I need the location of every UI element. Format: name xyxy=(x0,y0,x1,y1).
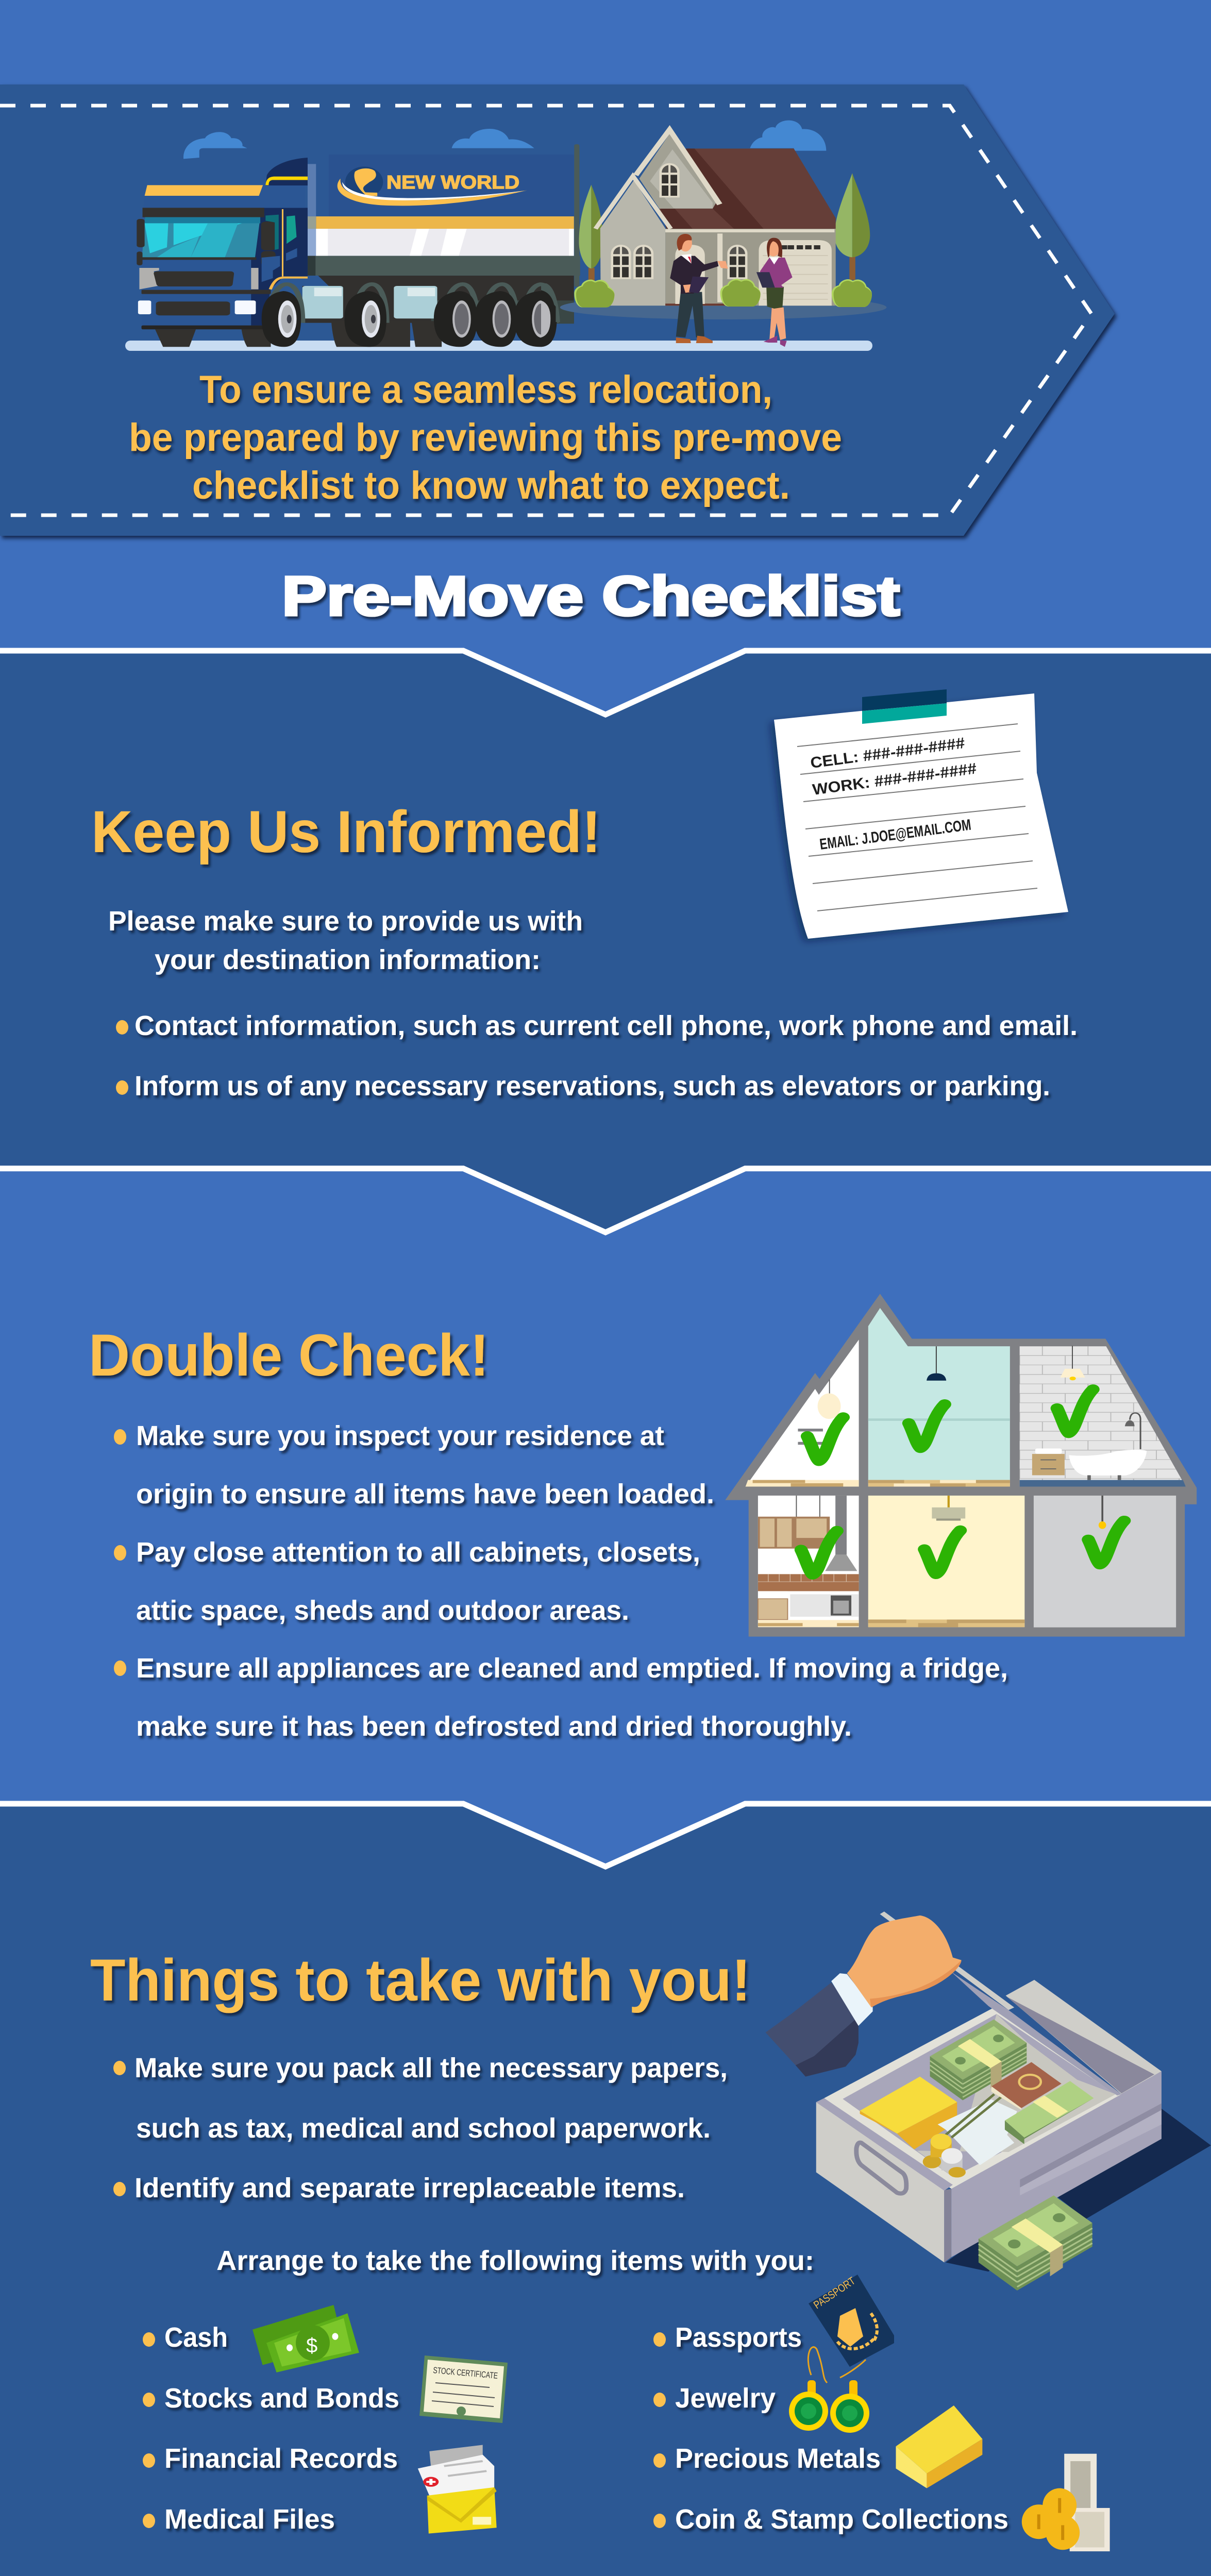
items list: left: Stocks and Bonds xyxy=(164,2383,399,2414)
items list: left: Cash xyxy=(164,2322,228,2353)
bullet list: such as tax, medical and school paperwork. xyxy=(136,2113,711,2144)
icon: earrings xyxy=(789,2347,869,2433)
icon: stock certificate: STOCK CERTIFICATE xyxy=(433,2365,498,2381)
icon: gold bar xyxy=(896,2405,982,2488)
bathroom xyxy=(1020,1346,1186,1486)
right tree xyxy=(849,257,855,280)
document xyxy=(938,2099,1017,2165)
green check marks xyxy=(808,1417,843,1461)
items list: right: Coin & Stamp Collections xyxy=(675,2504,1008,2535)
icon: passport xyxy=(809,2275,894,2367)
bullet list: Pay close attention to all cabinets, closets, xyxy=(136,1537,700,1568)
cab xyxy=(142,259,265,326)
text block: intro: your destination information: xyxy=(155,944,541,975)
wheels xyxy=(268,284,556,323)
grey room xyxy=(1034,1496,1176,1628)
bullet list: Identify and separate irreplaceable items. xyxy=(134,2173,685,2204)
icon: cash xyxy=(253,2305,359,2372)
walls xyxy=(640,133,716,209)
bullet list: Contact information, such as current cell phone, work phone and email. xyxy=(134,1010,1078,1041)
panel: Things to take with you xyxy=(0,1801,1211,2576)
icon: envelope and records xyxy=(418,2445,497,2534)
bullet list: Make sure you inspect your residence at xyxy=(136,1420,664,1451)
bullet list xyxy=(113,2053,814,2276)
text block: intro xyxy=(108,906,583,975)
illustration: contact note paper: EMAIL: J.DOE@EMAIL.COM xyxy=(819,817,972,853)
money xyxy=(930,2020,1027,2100)
garage xyxy=(759,240,832,306)
front money xyxy=(1005,2081,1094,2138)
panel: Double Check xyxy=(0,1165,1211,1805)
man xyxy=(676,292,704,337)
teal room xyxy=(868,1308,1010,1486)
bullet list: Make sure you pack all the necessary papers, xyxy=(134,2053,728,2083)
items list: right: Passports xyxy=(675,2322,802,2353)
icon: stock certificate xyxy=(419,2355,508,2423)
icon: cash: $ xyxy=(306,2334,317,2357)
illustration: hand opening drawer xyxy=(766,1911,1211,2272)
icon: passport: PASSPORT xyxy=(812,2275,857,2311)
handle xyxy=(856,2143,906,2194)
title: Pre-Move Checklist xyxy=(282,565,900,627)
illustration: truck xyxy=(137,129,574,347)
items list: right: Jewelry xyxy=(675,2383,776,2414)
heading: Double Check! xyxy=(89,1323,489,1388)
coins xyxy=(923,2155,941,2168)
roof xyxy=(660,148,836,229)
illustration: contact note paper: WORK: ###-###-#### xyxy=(812,760,978,799)
truck logo text: NEW WORLD xyxy=(386,172,519,193)
intro text xyxy=(129,368,842,507)
intro text: be prepared by reviewing this pre-move xyxy=(129,416,842,460)
items list: right xyxy=(653,2322,1008,2535)
items list: right: Precious Metals xyxy=(675,2443,881,2474)
icon: coins and stamps xyxy=(1022,2454,1110,2551)
kitchen xyxy=(758,1496,859,1627)
bullet list: attic space, sheds and outdoor areas. xyxy=(136,1595,629,1626)
bullet list: make sure it has been defrosted and dried thoroughly. xyxy=(136,1711,852,1742)
logo xyxy=(345,166,383,197)
hero arrow banner xyxy=(0,84,1115,536)
living room xyxy=(868,1496,1024,1627)
bullet list: origin to ensure all items have been loaded. xyxy=(136,1479,714,1510)
banner dashed stitching xyxy=(0,106,1091,515)
intro text: checklist to know what to expect. xyxy=(192,464,790,507)
intro text: To ensure a seamless relocation, xyxy=(199,368,772,412)
panel: Keep Us Informed xyxy=(0,648,1211,1168)
heading: Keep Us Informed! xyxy=(91,799,601,865)
bullet list: Ensure all appliances are cleaned and emptied. If moving a fridge, xyxy=(136,1653,1008,1684)
book xyxy=(991,2062,1062,2108)
bullet list xyxy=(116,1010,1078,1101)
illustration: contact note paper xyxy=(774,689,1068,939)
items list: left: Financial Records xyxy=(164,2443,398,2474)
text block: intro: Please make sure to provide us with xyxy=(108,906,583,937)
items list: left: Medical Files xyxy=(164,2504,335,2535)
bullet list: Inform us of any necessary reservations, such as elevators or parking. xyxy=(134,1071,1050,1101)
illustration: house and couple xyxy=(541,121,886,347)
illustration: house cross-section with checks xyxy=(725,1294,1197,1637)
bullet list: Arrange to take the following items with you: xyxy=(216,2245,814,2276)
sleeve, cuff and hand xyxy=(766,1982,859,2077)
woman xyxy=(769,308,786,340)
gold bar xyxy=(860,2077,957,2133)
items list: left xyxy=(143,2322,399,2535)
panel: hero header xyxy=(0,0,1211,648)
left tree xyxy=(588,268,595,281)
illustration: contact note paper: CELL: ###-###-#### xyxy=(810,735,966,772)
illustration: bundled money xyxy=(979,2195,1092,2291)
road bar xyxy=(125,341,872,351)
heading: Things to take with you! xyxy=(90,1947,751,2013)
bullet list xyxy=(114,1420,1008,1742)
attic room xyxy=(746,1340,859,1486)
